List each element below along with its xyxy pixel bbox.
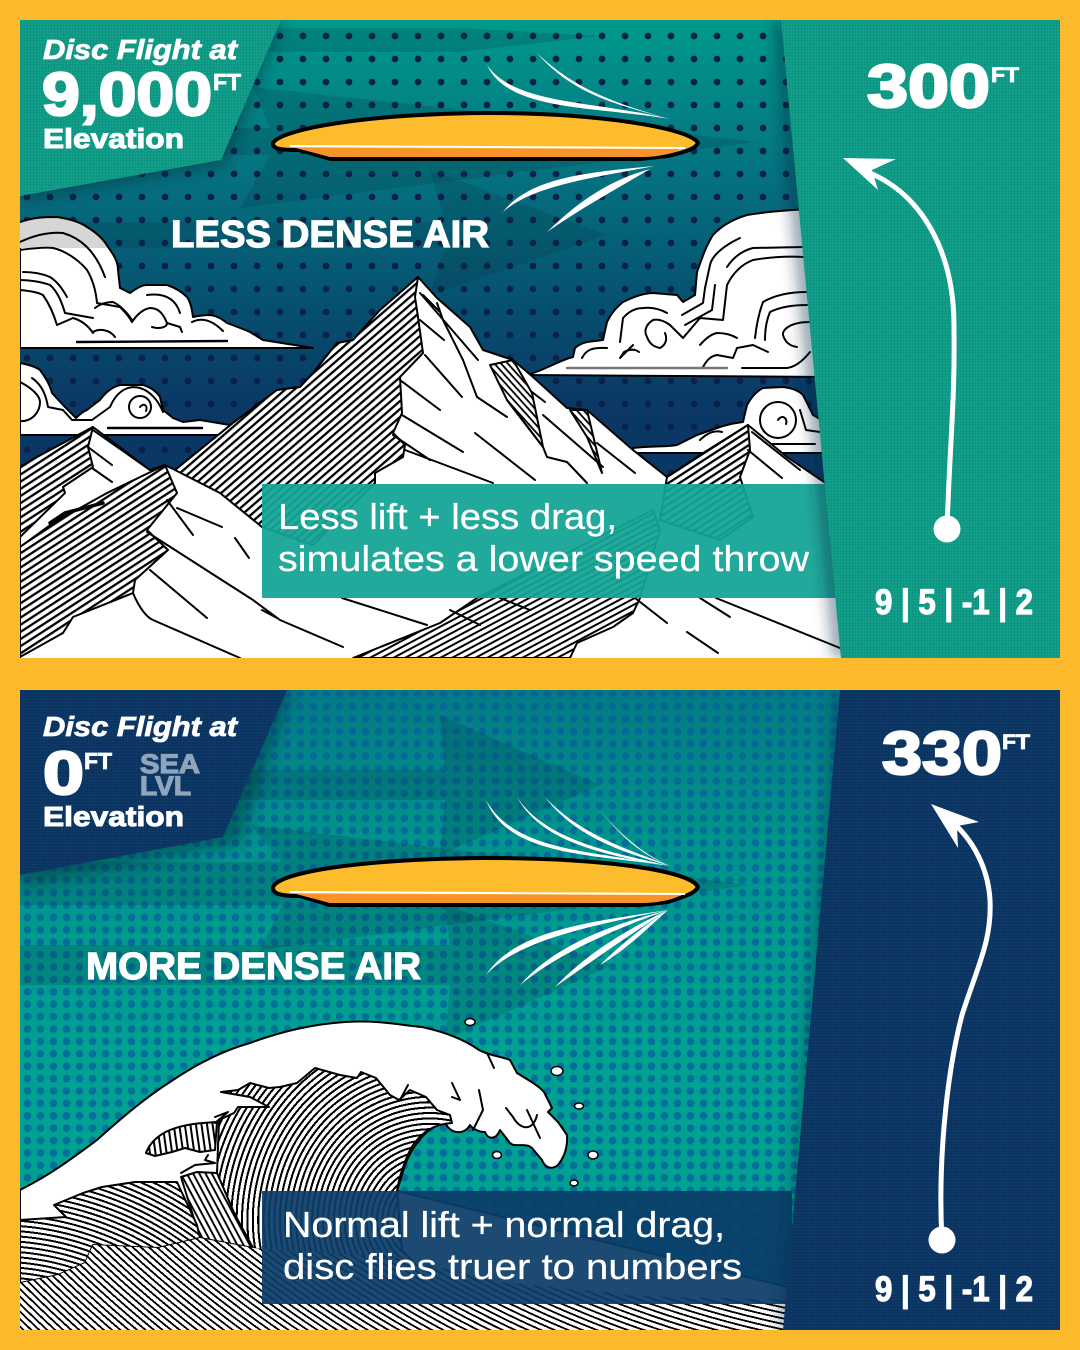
label: sea level: LVL <box>140 771 191 801</box>
callout text: less lift: simulates a lower speed throw <box>278 538 810 579</box>
callout text: normal lift: disc flies truer to numbers <box>283 1246 742 1287</box>
label: elevation: Elevation <box>43 123 184 154</box>
heading: disc flight at sea level: Disc Flight at <box>43 711 239 742</box>
unit: FT: FT <box>213 69 241 95</box>
label: elevation: Elevation <box>43 801 184 832</box>
flight path arrow: 330 ft <box>928 804 990 1254</box>
number: 9,000: 9,000 <box>42 61 212 128</box>
cloud: right lower <box>633 387 830 453</box>
mountain: contour and ridge lines <box>88 293 840 658</box>
panel: sea level 0 ft <box>20 690 1060 1340</box>
header panel: 9,000 ft <box>20 20 284 202</box>
wave: foam detail lines <box>181 1053 540 1173</box>
label: more dense air: MORE DENSE AIR <box>86 946 421 988</box>
number: 0: 0 <box>43 740 84 807</box>
label: sea level <box>140 749 200 801</box>
cloud: right large <box>527 208 830 377</box>
mountain: base hatching <box>353 510 660 658</box>
header panel: 0 ft <box>20 690 292 886</box>
mountain: far left hatching <box>20 427 93 537</box>
wave <box>20 1022 800 1340</box>
heading: disc flight at: Disc Flight at <box>43 34 239 65</box>
mountains <box>20 277 860 660</box>
disc: top <box>273 113 698 159</box>
disc: bottom <box>273 858 698 905</box>
air flow arrows <box>20 28 757 295</box>
right panel: distance 300 <box>772 20 1060 658</box>
unit: FT: FT <box>84 748 112 774</box>
mountain: foreground ridge hatching <box>20 465 177 657</box>
wave: mid streaks hatching <box>181 1172 253 1248</box>
flight numbers: bottom: 9 | 5 | -1 | 2 <box>875 1270 1033 1309</box>
sea spray droplets <box>465 1018 598 1186</box>
wave: lower swell hatching <box>20 1182 200 1283</box>
label: sea level: SEA <box>140 749 200 779</box>
distance: 300 ft <box>867 53 1019 120</box>
wave: white body <box>20 1020 786 1300</box>
wind lines: top disc <box>487 53 670 232</box>
flight path arrow: 300 ft <box>843 158 960 542</box>
distance: 330 ft <box>882 720 1030 787</box>
panel: high elevation 9,000 ft <box>20 20 1060 660</box>
distance: 300 ft: FT <box>991 64 1019 87</box>
wave: curl hatching <box>216 1067 453 1262</box>
right panel: distance 330 <box>777 690 1060 1330</box>
cloud: lower left <box>20 363 230 435</box>
callout box: normal lift <box>262 1191 792 1304</box>
sky with dot pattern <box>20 20 824 481</box>
distance: 300 ft: 300 <box>867 53 990 120</box>
air flow arrows <box>20 715 750 1040</box>
mountain: strips on right face <box>490 360 543 447</box>
callout text: less lift <box>278 496 810 579</box>
mountain: main left face hatching <box>175 277 423 545</box>
callout text: normal lift: Normal lift + normal drag, <box>283 1204 725 1245</box>
callout box: less lift <box>262 484 852 598</box>
distance: 330 ft: FT <box>1002 731 1030 754</box>
water background with dots <box>20 690 850 1330</box>
flight numbers: top: 9 | 5 | -1 | 2 <box>875 583 1033 622</box>
distance: 330 ft: 330 <box>882 720 1002 787</box>
wind lines: bottom disc <box>486 797 670 987</box>
cloud: upper left <box>20 215 313 348</box>
callout text: less lift: Less lift + less drag, <box>278 496 617 537</box>
wave: small crest hatching <box>146 1122 217 1156</box>
callout text: normal lift <box>283 1204 742 1287</box>
mountain: right small hatching <box>660 425 753 540</box>
wave: foreground sea hatching <box>20 1238 786 1330</box>
mountain: white silhouette <box>20 277 860 660</box>
label: less dense air: LESS DENSE AIR <box>171 214 489 256</box>
